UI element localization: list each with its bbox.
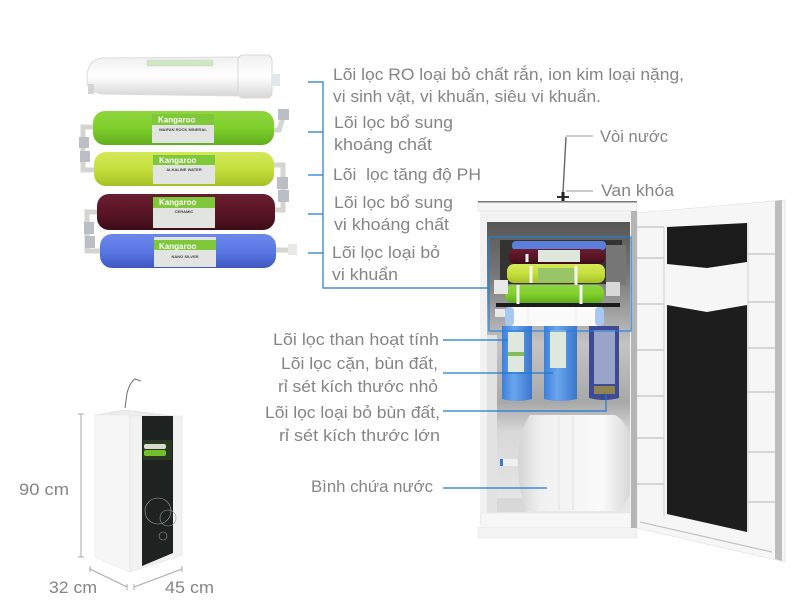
label: RO filter <box>333 65 684 106</box>
cabinet body <box>478 201 637 538</box>
filter bracket callout lines <box>308 82 489 288</box>
label: coarse sediment filter: rỉ sét kích thước lớn <box>279 427 440 445</box>
label: bacteria filter: vi khuẩn <box>332 266 398 284</box>
maroon ceramic filter: CERAMIC <box>175 209 193 214</box>
label: RO filter: Lõi lọc RO loại bỏ chất rắn, ion kim loại nặng, <box>333 65 684 84</box>
black front panel <box>142 416 176 566</box>
cabinet door <box>631 200 785 562</box>
label: micro mineral filter <box>334 194 453 234</box>
maroon ceramic filter: Kangaroo <box>159 198 196 207</box>
label: fine sediment filter: rỉ sét kích thước nhỏ <box>278 378 438 396</box>
label: valve: Van khóa <box>601 182 675 200</box>
filter stack illustration <box>79 55 297 268</box>
dimension: height <box>78 414 84 557</box>
yellow alkaline filter: Kangaroo <box>159 156 196 165</box>
open cabinet <box>478 137 785 562</box>
label: fine sediment filter: Lõi lọc cặn, bùn đất, <box>281 355 438 373</box>
label: 45 cm: 45 cm <box>165 579 214 597</box>
blue pre-filter canisters <box>502 326 619 401</box>
maroon ceramic filter <box>97 194 275 230</box>
label: 32 cm: 32 cm <box>49 579 97 597</box>
label: bacteria filter: Lõi lọc loại bỏ <box>332 244 440 262</box>
label: RO filter: vi sinh vật, vi khuẩn, siêu vi khuẩn. <box>333 88 601 106</box>
green mineral filter <box>93 111 274 145</box>
green mineral filter: MAIFAN ROCK MINERAL <box>159 127 207 132</box>
green mineral filter: Kangaroo <box>158 116 195 124</box>
label: micro mineral filter: Lõi lọc bổ sung <box>334 194 453 212</box>
label: mineral filter: Lõi lọc bổ sung <box>334 114 453 132</box>
yellow alkaline filter <box>94 152 274 186</box>
label: carbon filter: Lõi lọc than hoạt tính <box>273 331 439 349</box>
tube fittings <box>79 109 297 255</box>
blue nano silver filter: Kangaroo <box>159 242 196 251</box>
RO filters inside cabinet <box>494 240 626 326</box>
blue nano silver filter: NANO SILVER <box>171 254 199 259</box>
label: coarse sediment filter: Lõi lọc loại bỏ bùn đất, <box>265 404 440 422</box>
label: mineral filter <box>334 114 453 154</box>
door black panel upper <box>667 223 747 268</box>
faucet callout lines <box>566 136 593 191</box>
label: coarse sediment filter <box>265 404 440 445</box>
cabinet callout lines <box>443 340 606 488</box>
label: bacteria filter <box>332 244 440 284</box>
blue nano silver filter <box>100 234 276 268</box>
blue highlight box <box>489 237 631 331</box>
label: mineral filter: khoáng chất <box>334 136 432 154</box>
RO membrane filter <box>87 55 280 98</box>
label: 90 cm: 90 cm <box>19 481 69 499</box>
label: fine sediment filter <box>278 355 438 396</box>
tube connectors <box>83 118 296 251</box>
dimension: width <box>134 566 182 590</box>
water tank <box>497 415 630 512</box>
closed purifier product <box>95 379 182 572</box>
label: micro mineral filter: vi khoáng chất <box>334 216 449 234</box>
faucet <box>557 137 569 201</box>
dimension: depth <box>90 566 127 590</box>
label: water tank: Bình chứa nước <box>311 478 433 496</box>
label: faucet: Vòi nước <box>600 128 668 146</box>
label: pH filter: Lõi lọc tăng độ PH <box>333 166 481 184</box>
door black panel lower <box>667 305 747 532</box>
yellow alkaline filter: ALKALINE WATER <box>166 167 202 172</box>
